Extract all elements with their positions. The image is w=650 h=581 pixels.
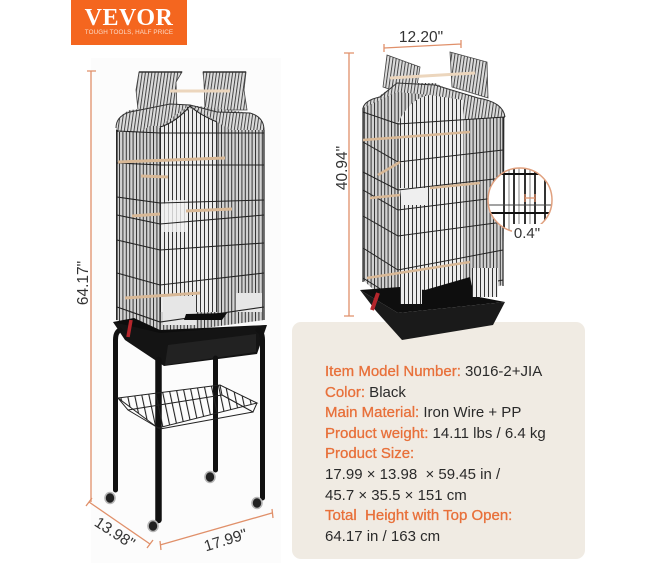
- text block: specifications list: Item Model Number: 3016-2+JIA: [325, 363, 542, 380]
- left cage: full stand and cage: [105, 72, 267, 532]
- text block: specifications list: Product weight: 14.11 lbs / 6.4 kg: [325, 425, 546, 442]
- loupe: wire spacing detail: [487, 167, 553, 232]
- label: wire spacing 0.4: 0.4": [514, 225, 540, 242]
- text block: specifications list: Total Height with Top Open:: [325, 507, 512, 524]
- panel: specifications: [292, 322, 585, 559]
- basket: [118, 385, 257, 429]
- text block: specifications list: Main Material: Iron Wire + PP: [325, 404, 521, 421]
- open lids: [383, 52, 488, 98]
- perches: [118, 158, 232, 298]
- left dimension lines: [86, 71, 273, 550]
- text block: specifications list: [325, 363, 546, 545]
- right cage: [360, 52, 505, 340]
- label: cage height 40.94: 40.94": [334, 146, 351, 190]
- tray: [113, 313, 267, 366]
- perches: [363, 132, 480, 278]
- text block: specifications list: 45.7 × 35.5 × 151 cm: [325, 487, 467, 504]
- text block: specifications list: Product Size:: [325, 445, 414, 462]
- cage body: [116, 104, 264, 335]
- backdrop: left product photo: [91, 58, 281, 563]
- label: depth 13.98: 13.98": [91, 514, 138, 552]
- label: width 17.99: 17.99": [202, 526, 249, 555]
- text block: specifications list: 64.17 in / 163 cm: [325, 528, 440, 545]
- lids: [136, 72, 247, 110]
- stand legs: [116, 330, 262, 520]
- logo: VEVOR: TOUGH TOOLS, HALF PRICE: [85, 29, 173, 36]
- casters: [105, 472, 262, 532]
- text block: specifications list: Color: Black: [325, 384, 406, 401]
- illustration: cages and dimensions: [77, 31, 553, 552]
- logo: VEVOR: [71, 0, 187, 45]
- food cups: [400, 268, 498, 304]
- label: height 64.17: 64.17": [75, 261, 92, 305]
- logo: VEVOR: VEVOR: [85, 5, 173, 31]
- right dimension lines: [344, 40, 461, 316]
- text block: specifications list: 17.99 × 13.98 × 59.45 in /: [325, 466, 500, 483]
- tray: [360, 277, 505, 340]
- cage body: [363, 83, 505, 312]
- label: cage width 12.20: 12.20": [399, 29, 443, 46]
